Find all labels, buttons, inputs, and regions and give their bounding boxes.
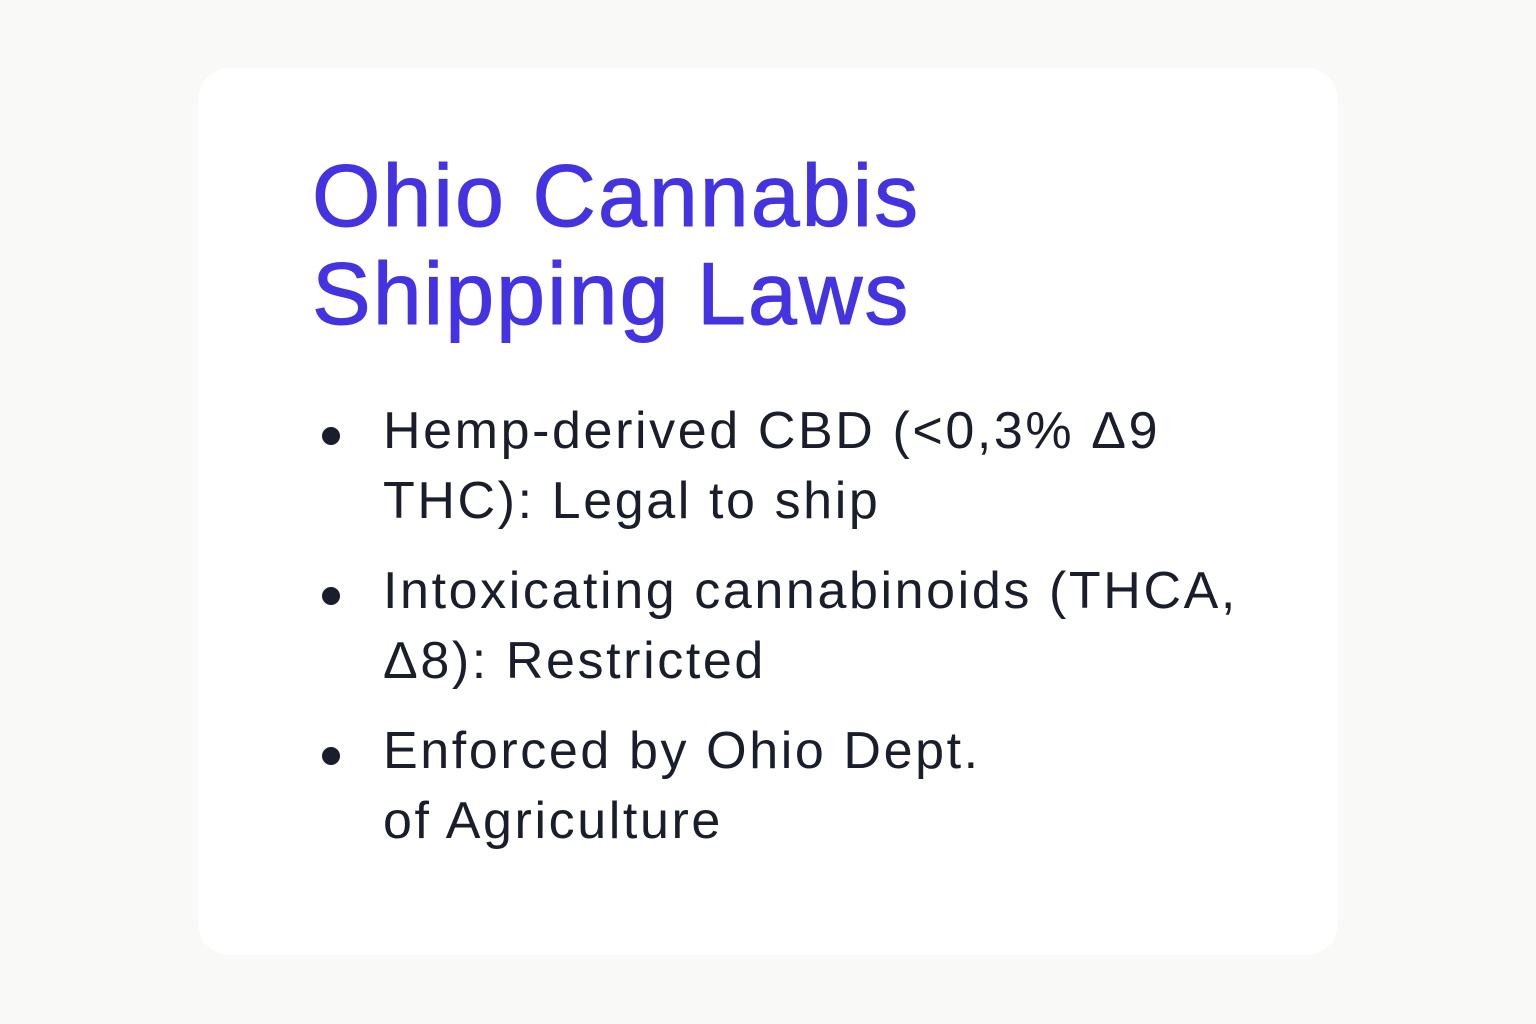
bullet dot [322, 427, 340, 445]
bullet: enforcement [322, 722, 981, 850]
bullet: intoxicating cannabinoids: Δ8): Restricted [383, 632, 766, 690]
bullet: hemp-derived CBD: Hemp-derived CBD (<0,3% Δ9 [383, 402, 1160, 460]
bullet dot [322, 587, 340, 605]
bullet: enforcement: Enforced by Ohio Dept. [383, 722, 981, 780]
bullet: intoxicating cannabinoids [322, 562, 1238, 690]
title: Ohio Cannabis [312, 146, 920, 245]
title: Shipping Laws [312, 244, 910, 343]
bullet: enforcement: of Agriculture [383, 792, 723, 850]
card panel [198, 68, 1338, 955]
title [312, 146, 920, 343]
bullet: intoxicating cannabinoids: Intoxicating cannabinoids (THCA, [383, 562, 1238, 620]
bullet dot [322, 747, 340, 765]
bullet: hemp-derived CBD: THC): Legal to ship [383, 472, 880, 530]
bullet: hemp-derived CBD [322, 402, 1160, 530]
